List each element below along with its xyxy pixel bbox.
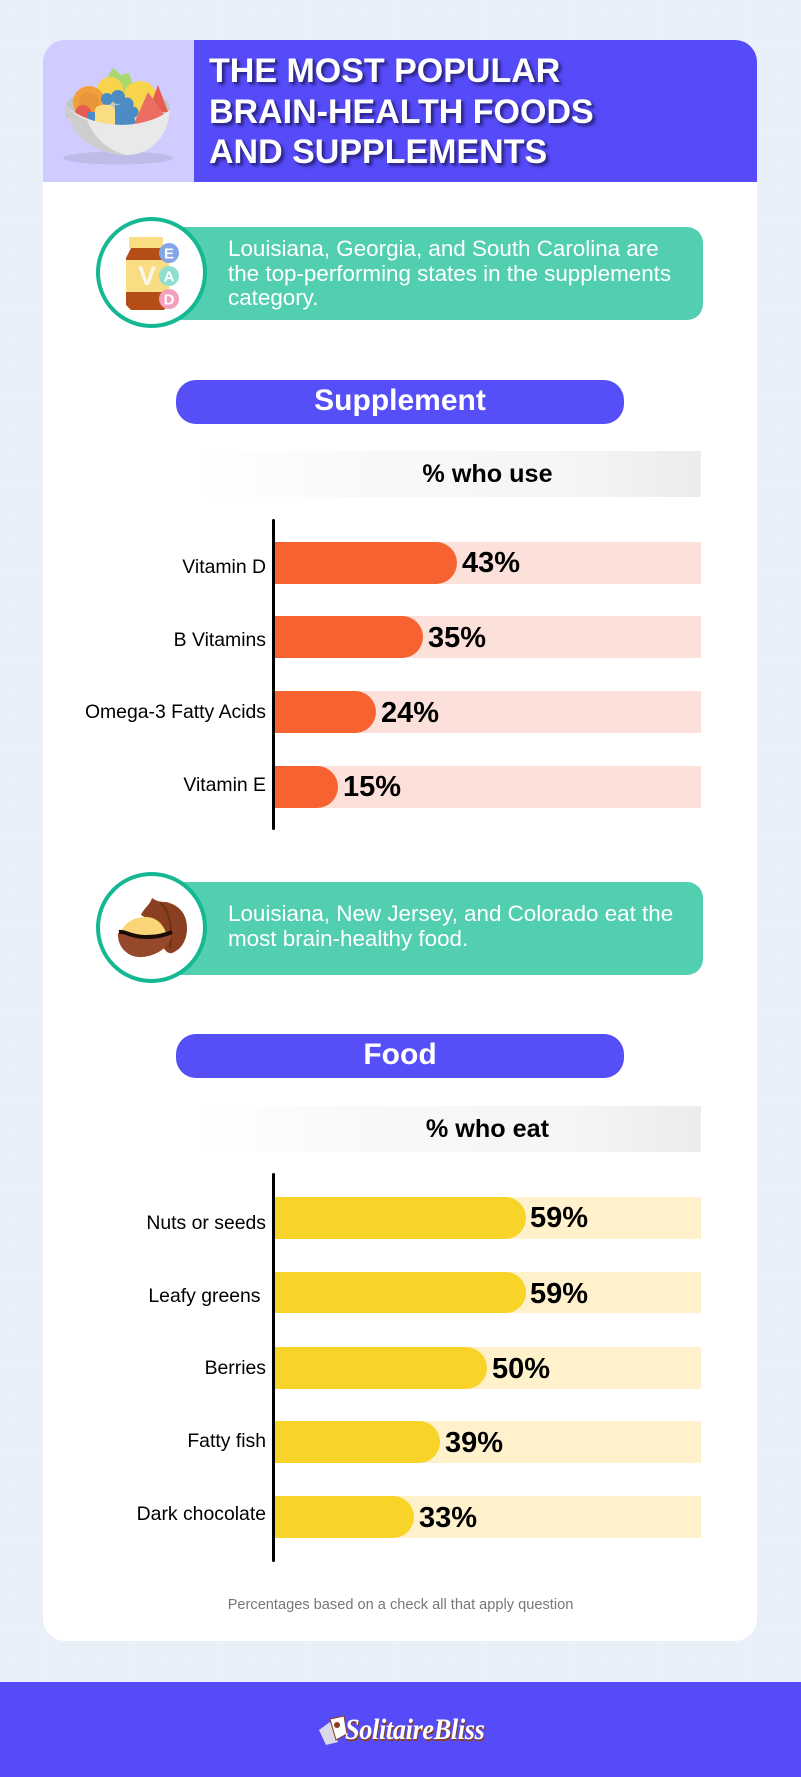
bar: Leafy greens bbox=[275, 1272, 701, 1313]
icon: vitamin bottle: V bbox=[138, 261, 156, 291]
label: Vitamin D: Vitamin D bbox=[182, 556, 266, 578]
callout background bbox=[179, 227, 703, 320]
callout text: category. bbox=[228, 285, 318, 310]
title: AND SUPPLEMENTS bbox=[209, 132, 547, 170]
bar chart: food bbox=[137, 1173, 701, 1562]
value: 35%: 35% bbox=[428, 622, 486, 654]
icon: vitamin bottle: D bbox=[164, 292, 175, 308]
label: Omega-3 Fatty Acids: Omega-3 Fatty Acids bbox=[85, 701, 266, 723]
value: 50%: 50% bbox=[492, 1353, 550, 1385]
heading: Food bbox=[176, 1034, 624, 1078]
chart axis bbox=[272, 519, 275, 830]
header illustration panel bbox=[43, 40, 194, 182]
column header: % who use bbox=[200, 451, 701, 497]
bar: Dark chocolate bbox=[275, 1496, 701, 1538]
bar chart: supplements bbox=[85, 519, 701, 830]
callout background bbox=[179, 882, 703, 975]
heading: Supplement bbox=[176, 380, 624, 424]
callout text: Louisiana, New Jersey, and Colorado eat the bbox=[228, 901, 673, 926]
callout text: the top-performing states in the supplements bbox=[228, 261, 671, 286]
value: 59%: 59% bbox=[530, 1202, 588, 1234]
title: BRAIN-HEALTH FOODS bbox=[209, 92, 594, 130]
chart axis bbox=[272, 1173, 275, 1562]
icon: fruit bowl bbox=[63, 68, 173, 164]
label: B Vitamins: B Vitamins bbox=[174, 629, 266, 651]
header title panel bbox=[194, 40, 757, 182]
icon: vitamin bottle bbox=[126, 237, 179, 310]
column header: % who eat bbox=[200, 1106, 701, 1152]
icon: vitamin bottle: E bbox=[164, 246, 174, 262]
bar: Vitamin E bbox=[275, 766, 701, 808]
heading: Food: Food bbox=[363, 1038, 437, 1071]
value: 59%: 59% bbox=[530, 1278, 588, 1310]
bar: Vitamin D bbox=[275, 542, 701, 584]
bar: Berries bbox=[275, 1347, 701, 1388]
callout text: Louisiana, Georgia, and South Carolina are bbox=[228, 236, 659, 261]
value: 24%: 24% bbox=[381, 697, 439, 729]
label: Berries: Berries bbox=[205, 1357, 266, 1379]
logo: Solitaire Bliss bbox=[319, 1713, 485, 1746]
label: Nuts or seeds: Nuts or seeds bbox=[146, 1212, 266, 1234]
label: Leafy greens: Leafy greens bbox=[148, 1285, 260, 1307]
heading: Supplement: Supplement bbox=[314, 384, 486, 417]
callout text: most brain-healthy food. bbox=[228, 926, 468, 951]
footer band bbox=[0, 1682, 801, 1777]
icon ring bbox=[96, 872, 207, 983]
bar: Fatty fish bbox=[275, 1421, 701, 1463]
value: 43%: 43% bbox=[462, 547, 520, 579]
callout: food bbox=[96, 872, 703, 983]
label: Fatty fish: Fatty fish bbox=[187, 1430, 266, 1452]
icon ring bbox=[96, 217, 207, 328]
column header: % who eat: % who eat bbox=[426, 1115, 549, 1143]
value: 39%: 39% bbox=[445, 1427, 503, 1459]
callout: supplements bbox=[96, 217, 703, 328]
footnote: Percentages based on a check all that apply question bbox=[228, 1597, 573, 1613]
label: Dark chocolate: Dark chocolate bbox=[137, 1503, 266, 1525]
value: 33%: 33% bbox=[419, 1502, 477, 1534]
label: Vitamin E: Vitamin E bbox=[183, 774, 266, 796]
value: 15%: 15% bbox=[343, 771, 401, 803]
callout text bbox=[228, 236, 671, 310]
callout text bbox=[228, 901, 673, 951]
bar: Nuts or seeds bbox=[275, 1197, 701, 1238]
logo wordmark: SolitaireBliss bbox=[345, 1713, 485, 1746]
title bbox=[209, 52, 598, 170]
title: THE MOST POPULAR bbox=[209, 52, 560, 90]
icon: macadamia nut bbox=[118, 898, 187, 958]
bar: Omega-3 Fatty Acids bbox=[275, 691, 701, 733]
icon: playing cards bbox=[319, 1715, 348, 1745]
bar: B Vitamins bbox=[275, 616, 701, 658]
column header: % who use: % who use bbox=[422, 460, 553, 488]
icon: vitamin bottle: A bbox=[164, 268, 175, 286]
